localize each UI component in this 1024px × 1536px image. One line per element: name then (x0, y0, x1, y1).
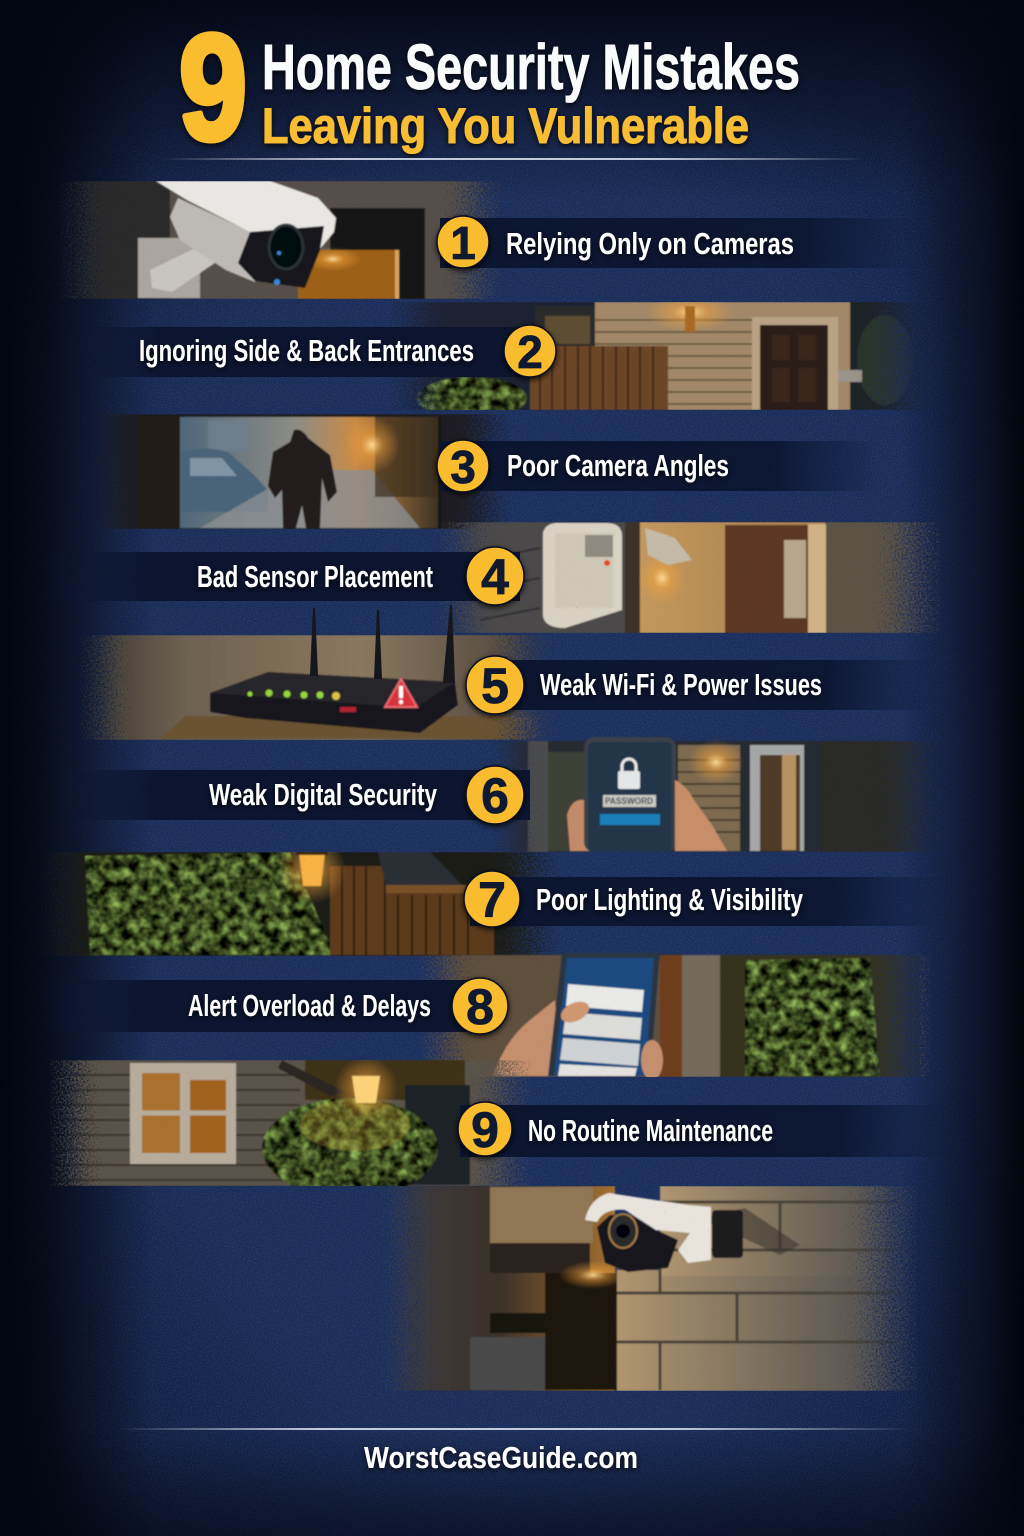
title divider (165, 158, 865, 160)
mistake 6: Weak Digital Security (209, 777, 438, 812)
mistake 2: Ignoring Side & Back Entrances (139, 333, 474, 368)
router antennas (311, 605, 454, 682)
mistake 5: 5 (481, 658, 509, 714)
photo 1: security camera by a doorway (60, 181, 500, 299)
dark label bands (40, 218, 960, 1157)
mistake 8: 8 (466, 979, 494, 1035)
photo 7: wall lantern, bushes and fence (40, 852, 560, 956)
mistake 7: Poor Lighting & Visibility (536, 882, 804, 917)
photo 8: hand holding phone with alerts (420, 953, 930, 1080)
title (262, 31, 800, 154)
mistake 8: Alert Overload & Delays (188, 988, 431, 1023)
mistake 1: Relying Only on Cameras (506, 226, 794, 261)
mistake 7 (464, 871, 804, 928)
photo 10: wall mounted bullet camera (380, 1186, 917, 1391)
mistake 7: 7 (478, 872, 506, 928)
mistake 1: 1 (450, 217, 476, 269)
mistake 4: Bad Sensor Placement (197, 559, 433, 594)
photo 3: camera view of person walking (90, 414, 510, 529)
footer divider (120, 1428, 910, 1430)
mistake 1 (437, 216, 794, 269)
title: Home Security Mistakes (262, 31, 800, 103)
mistake 8 (188, 978, 508, 1035)
mistake 6 (209, 766, 524, 824)
mistake 5 (466, 656, 822, 714)
mistake 9: 9 (471, 1102, 499, 1158)
mistake 4 (197, 547, 524, 605)
big number 9: 9 (179, 3, 247, 171)
photo 5: Wi-Fi router with warning icon (80, 635, 550, 740)
password field label: PASSWORD (605, 796, 653, 806)
footer website: WorstCaseGuide.com (364, 1440, 638, 1475)
photo 2: house side entrance with fence (390, 302, 930, 410)
mistake 6: 6 (481, 768, 509, 824)
mistake 5: Weak Wi-Fi & Power Issues (540, 667, 822, 702)
mistake 3: 3 (450, 441, 476, 493)
photo 4: motion sensor and porch light (440, 522, 940, 633)
mistake 3 (437, 440, 729, 493)
mistake 9: No Routine Maintenance (528, 1113, 773, 1148)
photo 6: phone with password lock screen (490, 737, 940, 852)
photo 9: house window, lantern and shrub (50, 1060, 530, 1186)
subtitle: Leaving You Vulnerable (262, 98, 749, 154)
mistake 4: 4 (481, 549, 509, 605)
mistake 3: Poor Camera Angles (507, 448, 729, 483)
mistake 9 (458, 1102, 773, 1158)
mistake 2 (139, 325, 556, 378)
mistake 2: 2 (517, 326, 543, 378)
